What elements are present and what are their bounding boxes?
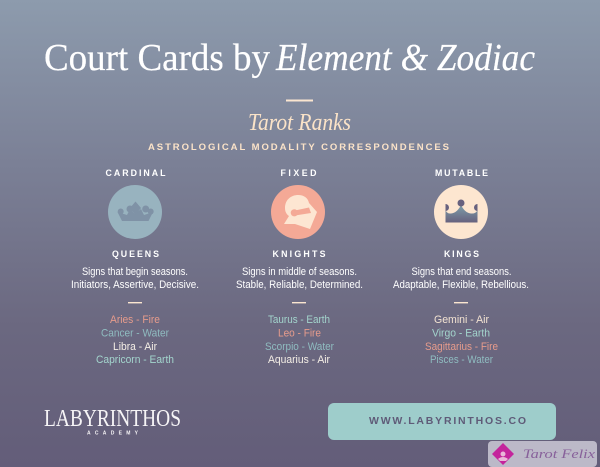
panel: mutable kings (393, 168, 529, 366)
button: website: WWW.LABYRINTHOS.CO (369, 415, 526, 427)
sign list (265, 314, 334, 366)
title: Element & Zodiac (275, 37, 535, 79)
subheading: astrological modality: ASTROLOGICAL MODALITY CORRESPONDENCES (148, 142, 449, 153)
description (71, 266, 199, 291)
divider (454, 302, 468, 303)
icon: queen crown (108, 185, 162, 239)
sign list: Pisces - Water (430, 354, 493, 366)
description (236, 266, 363, 291)
watermark: tarot felix (488, 441, 597, 467)
sign list: Aquarius - Air (268, 354, 330, 366)
sign list: Cancer - Water (101, 328, 169, 340)
title: Court Cards by (44, 37, 270, 79)
description (393, 266, 529, 291)
logo: labyrinthos academy: LABYRINTHOS (44, 406, 181, 432)
divider (292, 302, 306, 303)
heading: mutable: MUTABLE (435, 168, 488, 178)
sign list: Leo - Fire (278, 328, 321, 340)
description: Initiators, Assertive, Decisive. (71, 279, 199, 291)
heading: kings: KINGS (444, 249, 479, 259)
title rule (286, 100, 313, 102)
sign list: Aries - Fire (110, 314, 160, 326)
sign list: Gemini - Air (434, 314, 489, 326)
button: website (328, 403, 556, 440)
sign list: Virgo - Earth (432, 328, 490, 340)
divider (128, 302, 142, 303)
icon: knight helmet (271, 185, 325, 239)
watermark: tarot felix: Tarot Felix (523, 446, 595, 461)
panel: cardinal queens (71, 168, 199, 366)
sign list: Capricorn - Earth (96, 354, 174, 366)
icon: king crown (434, 185, 488, 239)
sign list (425, 314, 498, 366)
sign list: Scorpio - Water (265, 341, 334, 353)
heading: cardinal: CARDINAL (106, 168, 166, 178)
description: Adaptable, Flexible, Rebellious. (393, 279, 529, 291)
description: Signs that begin seasons. (82, 266, 188, 278)
subtitle: tarot ranks: Tarot Ranks (248, 110, 351, 136)
description: Signs that end seasons. (412, 266, 512, 278)
title (44, 37, 535, 79)
sign list: Libra - Air (113, 341, 157, 353)
panel: fixed knights (236, 168, 363, 366)
sign list: Sagittarius - Fire (425, 341, 498, 353)
heading: queens: QUEENS (112, 249, 159, 259)
logo: labyrinthos academy: ACADEMY (87, 430, 139, 436)
sign list: Taurus - Earth (268, 314, 330, 326)
description: Signs in middle of seasons. (242, 266, 357, 278)
description: Stable, Reliable, Determined. (236, 279, 363, 291)
heading: fixed: FIXED (280, 168, 316, 178)
heading: knights: KNIGHTS (272, 249, 326, 259)
sign list (96, 314, 174, 366)
